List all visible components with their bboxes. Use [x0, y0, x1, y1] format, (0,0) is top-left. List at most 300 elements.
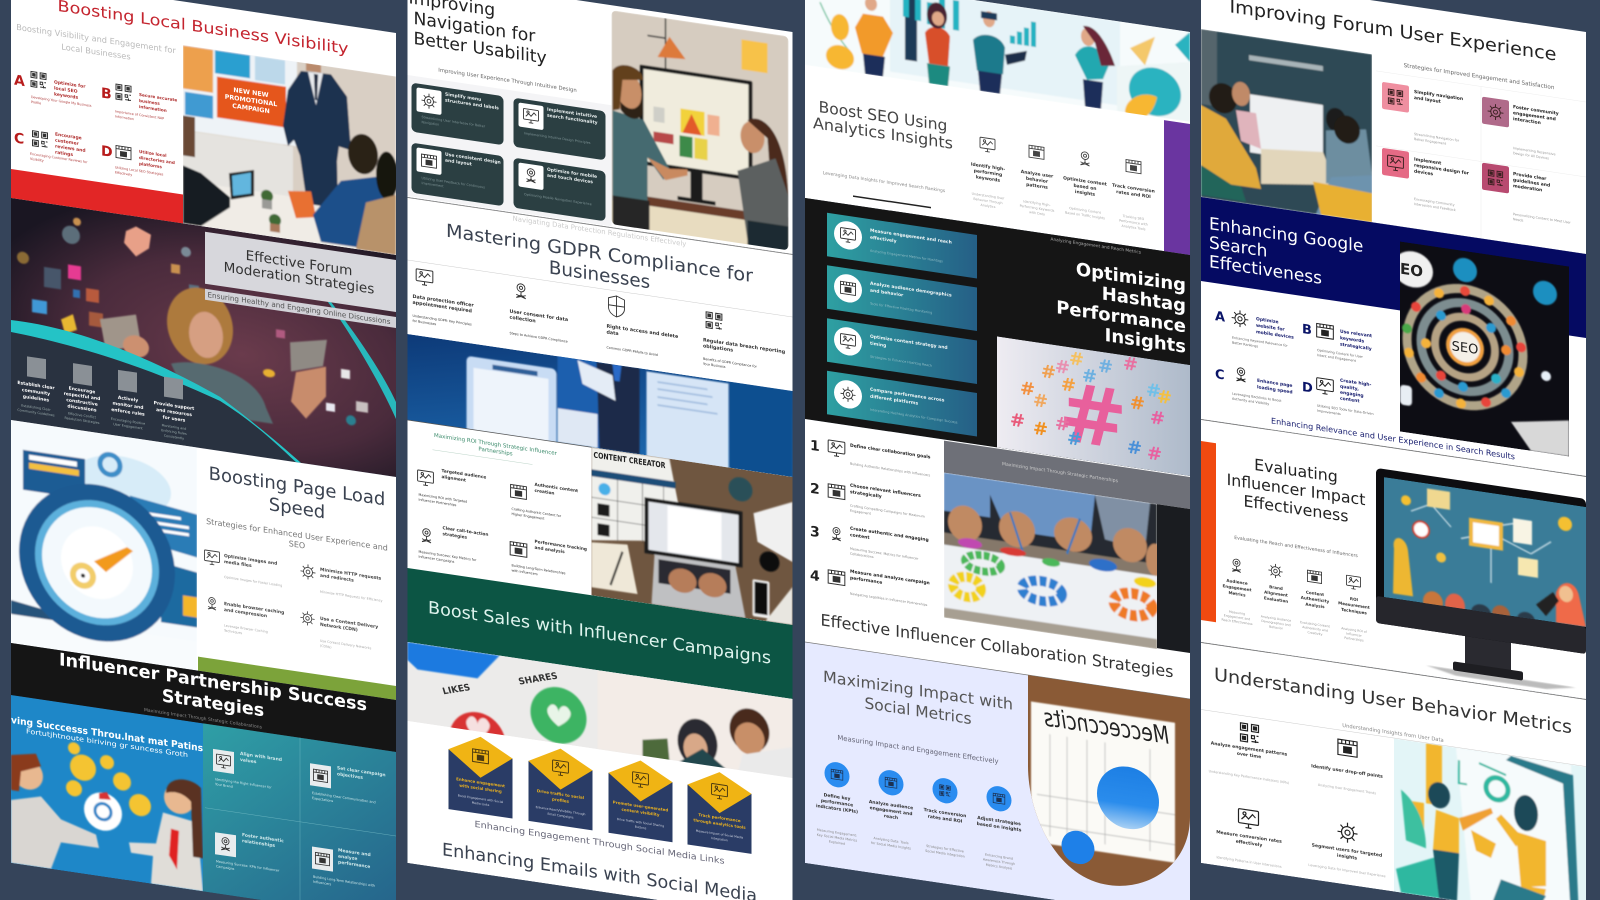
teal grid panel	[203, 723, 396, 900]
image: hand-drawn chart with blue circles	[1028, 675, 1190, 899]
item text: Analyzing User Engagement Trends	[1318, 783, 1376, 795]
item A: A	[1215, 309, 1226, 326]
icon	[828, 570, 845, 586]
title: Influencer Impact	[1227, 470, 1365, 509]
item text: Optimizing Content	[1069, 206, 1102, 215]
item: browser caching	[208, 597, 284, 641]
item 2	[810, 477, 925, 524]
item text: Encouraging Positive	[111, 417, 145, 426]
item text: Intent and Engagement	[1317, 353, 1357, 363]
icon	[313, 769, 328, 783]
big hashtag: #	[1059, 364, 1127, 470]
item text: Right to access and delete	[606, 323, 679, 340]
item text: strategically	[1340, 342, 1372, 352]
item text: media files	[224, 559, 252, 569]
card text: Optimize for mobile	[547, 167, 597, 180]
subtitle: Strategies for Improved Engagement and Satisfaction	[1404, 63, 1555, 91]
photo: desk with laptop and content calendar	[592, 447, 792, 625]
card text: Enhance engagement	[456, 776, 505, 788]
item text: Minimize HTTP requests	[320, 567, 382, 582]
icon	[633, 772, 648, 788]
item text: Influencer Campaigns	[419, 555, 455, 564]
title: Effectiveness	[1243, 491, 1349, 526]
item text: Leverage Browser Caching	[224, 624, 268, 634]
item text: Social Media Integration	[925, 849, 965, 859]
item text: Performing Keywords	[1020, 204, 1055, 213]
item text: Information	[115, 114, 134, 121]
icon	[1388, 89, 1403, 105]
item text: Set clear campaign	[337, 765, 386, 778]
icon	[1232, 309, 1248, 328]
item text: for Businesses	[413, 319, 437, 326]
teal arc	[277, 238, 396, 419]
item D	[102, 145, 175, 176]
item: call to action	[418, 522, 488, 569]
item text: Your Brand	[215, 782, 233, 789]
small hashtags	[1010, 336, 1172, 467]
item text: based on	[1073, 183, 1097, 192]
item text: Crafting Compelling Campaigns for Maximum	[850, 504, 925, 519]
icon	[526, 168, 536, 183]
item text: Resolution Strategies	[65, 416, 100, 425]
item text: Navigating Legalities in Influencer Partnerships	[850, 592, 928, 607]
card text: Integration	[711, 836, 728, 842]
item: access	[606, 294, 679, 360]
item text: Alignment	[1264, 589, 1288, 598]
item: tracking	[510, 535, 587, 584]
garbled image text: ving Succcesss Throu.lnat mat Patins	[11, 715, 203, 754]
illustration: analytics team	[805, 0, 1190, 127]
subtitle: Maximizing Impact Through Strategic Partnerships	[1002, 461, 1119, 484]
item text: Campaigns	[216, 864, 235, 871]
item text: Reach Effectiveness	[1221, 618, 1253, 626]
item text: Establish clear	[17, 380, 55, 392]
item text: Performance with	[1119, 219, 1148, 227]
card text: Drive traffic to social	[537, 788, 585, 800]
icon	[712, 783, 727, 800]
item text: Adjust strategies	[977, 815, 1021, 827]
item text: obligations	[703, 343, 733, 354]
item: measure	[312, 844, 375, 893]
item text: Brand	[1269, 584, 1283, 591]
item 4	[810, 563, 930, 607]
item text: Create high-	[1340, 378, 1371, 388]
item text: Enable browser caching	[224, 601, 284, 616]
item text: analyze	[338, 853, 357, 862]
item text: Create authentic and engaging	[850, 526, 929, 543]
card text: Track performance	[698, 812, 741, 823]
purple strip	[1164, 120, 1190, 255]
bar text: Analyze audience demographics	[870, 281, 952, 299]
item text: Personalizing Content to Meet User	[1513, 212, 1571, 225]
item 1	[17, 355, 55, 418]
card text: Navigation	[422, 120, 439, 127]
item text: devices	[1414, 169, 1433, 177]
bar text: Measure engagement and reach	[870, 228, 952, 246]
item text: Engagement and	[1224, 613, 1250, 621]
title: Evaluating	[1254, 455, 1338, 486]
item text: content	[850, 532, 870, 541]
item text: guidelines	[23, 394, 49, 404]
item text: (CDNs)	[320, 644, 332, 649]
item text: loading speed	[1257, 384, 1293, 396]
panel: Boost SEO Using Analytics Insights	[805, 0, 1190, 255]
mirrored handwriting: Mecceccncits	[1044, 703, 1169, 750]
icon	[1488, 103, 1503, 121]
item text: moderation	[1513, 183, 1542, 193]
item text: Authenticity	[1301, 595, 1330, 604]
item text: ratings	[55, 150, 73, 158]
item: DPO	[412, 268, 474, 332]
title: Speed	[269, 494, 325, 523]
item text: quality,	[1340, 384, 1359, 392]
card text: Streamlining User Interfaces for Better	[421, 115, 486, 129]
item text: creation	[534, 488, 554, 497]
item text: responsive design for	[1414, 163, 1470, 177]
item D	[1302, 372, 1374, 421]
item text: Your Business	[703, 362, 726, 369]
item text: Encourage	[69, 386, 95, 395]
illustration: documents and businessman	[408, 330, 792, 484]
panel: Improving Navigation for Better Usability	[408, 0, 792, 257]
subtitle: Enhancing Engagement Through Social Media Links	[475, 820, 725, 867]
card text: with social sharing	[459, 783, 502, 794]
item 1: 1	[810, 438, 820, 455]
title: Strategies	[162, 686, 264, 721]
icon	[1346, 575, 1361, 590]
item text: Optimize Images for Faster Loading	[224, 575, 282, 588]
panel: Improving Forum User Experience	[1201, 0, 1586, 254]
item text: information	[139, 104, 167, 113]
icon	[840, 386, 856, 403]
item text: Optimize for	[54, 79, 86, 90]
item text: Track conversion	[924, 807, 966, 819]
campaign text on screen: CAMPAIGN	[232, 103, 270, 115]
item text: Measuring Success: KPIs for Influencer	[216, 859, 280, 873]
item text: keywords	[976, 174, 1000, 184]
item text: over time	[1237, 751, 1261, 760]
item text: Utilize local	[139, 149, 167, 158]
item text: values	[240, 757, 257, 765]
illustration: team at monitor	[612, 10, 788, 256]
item text: Utilizing Local SEO Strategies	[115, 165, 164, 177]
subtitle: Local Businesses	[61, 41, 131, 62]
icon	[1488, 170, 1503, 186]
item text: Align with brand	[240, 751, 282, 763]
item text: Evaluating Content	[1300, 620, 1331, 629]
item text: Data protection officer	[412, 294, 474, 309]
item text: performance	[850, 575, 882, 586]
underline	[853, 196, 931, 208]
item text: Profile	[31, 100, 41, 105]
green band	[408, 568, 792, 699]
card text: Measure Impact of Social Media	[696, 829, 743, 840]
subtitle box	[205, 289, 396, 328]
item text: Influencers	[313, 880, 331, 886]
item text: Understanding Key Performance Indicators (KPIs)	[1209, 769, 1289, 785]
item 2	[1020, 144, 1055, 218]
item text: Enhancing Brand	[985, 853, 1013, 861]
item: align	[213, 747, 282, 796]
icon	[208, 597, 216, 610]
icon	[940, 785, 950, 797]
item text: effectively	[1236, 839, 1262, 849]
image: hashtags	[997, 335, 1190, 479]
item text: indicators (KPIs)	[816, 803, 858, 815]
item text: Leveraging Backlinks to Boost	[1232, 392, 1282, 403]
item text: Strategies for Effective	[926, 844, 964, 854]
item text: Partnerships	[1344, 636, 1364, 643]
card text: Utilizing User Feedback for Continuous	[421, 176, 485, 190]
item: breach	[703, 311, 786, 378]
icon	[1338, 821, 1358, 844]
card 1	[448, 732, 512, 819]
card 1	[412, 83, 504, 145]
icon	[980, 137, 995, 153]
item text: Tracking SEO	[1122, 214, 1145, 221]
item text: Measurement	[1338, 600, 1370, 610]
title: Navigation for	[414, 9, 536, 47]
item text: Identifying Patterns in User Interactions	[1216, 855, 1282, 869]
green band	[198, 657, 396, 700]
item: drop-off	[1311, 735, 1383, 796]
item text: Authenticity and	[1302, 625, 1328, 633]
small hashtags: #	[1055, 356, 1070, 379]
panel: Understanding User Behavior Metrics	[1201, 642, 1586, 900]
photo: likes, shares and couple	[408, 642, 792, 815]
subtitle: Improving User Experience Through Intuitive Design	[438, 68, 577, 94]
icon	[832, 527, 841, 541]
item text: strategies	[442, 531, 468, 541]
title: Boost SEO Using	[819, 98, 947, 135]
item text: Improvements	[1317, 409, 1341, 416]
item text: reviews and	[55, 144, 86, 154]
card 3	[608, 756, 672, 842]
item D: D	[1302, 380, 1313, 397]
card 3	[412, 143, 504, 206]
item text: Creativity	[1308, 630, 1323, 636]
item: guidelines	[1482, 163, 1571, 230]
panel: Enhancing Google Search Effectiveness	[1201, 197, 1586, 476]
illustration: monitor	[1376, 468, 1586, 695]
icon	[1080, 151, 1090, 166]
subtitle: Navigating Data Protection Regulations Effectively	[513, 215, 686, 248]
bar text: and behavior	[870, 288, 904, 299]
item text: Design for All Devices	[1513, 151, 1549, 161]
small hashtags: #	[1055, 413, 1070, 436]
icon	[1240, 723, 1258, 744]
card 2	[528, 744, 592, 830]
item text: Authority and Visibility	[1232, 397, 1269, 406]
item text: Monitoring and	[162, 423, 186, 431]
item: ROI	[1338, 574, 1370, 643]
item: audience	[418, 465, 486, 512]
item text: Performance tracking	[534, 539, 587, 553]
title: Analytics Insights	[813, 114, 953, 153]
item: CDN	[300, 610, 378, 656]
item text: Define clear collaboration goals	[850, 443, 931, 461]
item text: Provide support	[154, 400, 195, 412]
item: responsive	[1382, 148, 1470, 214]
item text: Expectations	[312, 796, 333, 803]
small hashtags: #	[1082, 365, 1097, 388]
item text: Influencer Partnerships	[419, 498, 457, 507]
card 2	[514, 98, 606, 160]
bar text: Interpreting Hashtag Analytics for Campaign Success	[870, 408, 958, 425]
bar text: Strategies to Enhance Hashtag Reach	[870, 355, 932, 368]
icon	[1232, 559, 1241, 573]
item text: Use relevant	[1340, 329, 1373, 339]
title: Optimizing	[1076, 259, 1186, 296]
small hashtags: #	[1098, 355, 1113, 379]
small hashtags: #	[1130, 392, 1145, 415]
icon	[216, 754, 231, 769]
item: navigation	[1382, 82, 1463, 148]
subtitle: Strategies for Enhanced User Experience and	[206, 517, 388, 553]
item text: Measure conversion rates	[1216, 829, 1282, 845]
item 2: 2	[810, 481, 820, 498]
title box	[205, 232, 396, 312]
title: Effective Influencer Collaboration Strategies	[820, 610, 1173, 682]
item text: Foster community	[1513, 104, 1559, 117]
item text: behavior	[1026, 176, 1049, 185]
icon	[27, 356, 46, 379]
card text: Media Links	[472, 801, 490, 807]
column 4 of slides	[1201, 0, 1586, 900]
item text: Measure and	[338, 847, 371, 858]
item text: Collaborations	[850, 552, 874, 559]
item text: Engagement	[850, 509, 872, 516]
item text: Identifying High-	[1023, 199, 1051, 207]
illustration: speed gauge	[11, 420, 197, 671]
item text: customer	[55, 138, 79, 147]
illustration: handshake with coins	[11, 695, 203, 891]
dark side block	[1157, 504, 1190, 653]
column 1 of slides	[11, 0, 398, 900]
small hashtags: #	[1041, 361, 1056, 384]
icon	[1268, 563, 1283, 579]
icon	[118, 370, 137, 393]
bar 3	[827, 318, 977, 384]
cloud label: EO	[1400, 260, 1423, 281]
item text: Implement	[1414, 157, 1442, 167]
title: Businesses	[549, 258, 650, 293]
item text: engaging	[1340, 390, 1364, 399]
subtitle: Ensuring Healthy and Engaging Online Discussions	[208, 290, 391, 326]
item text: Analyze audience	[869, 799, 913, 811]
icon	[204, 550, 220, 566]
item text: Analyzing ROI of	[1341, 626, 1368, 634]
small hashtags: #	[1069, 348, 1084, 371]
item 3	[111, 369, 145, 431]
item text: and redirects	[320, 573, 354, 584]
item: brand	[1261, 562, 1291, 632]
item text: Maximizing ROI with Targeted	[419, 493, 467, 504]
card text: content visibility	[622, 807, 660, 817]
item text: Identifying the Right Influencer for	[215, 777, 272, 790]
item text: Community Guidelines	[17, 408, 55, 417]
item text: Measuring Engagement:	[817, 828, 857, 838]
card text: Buttons	[635, 825, 647, 830]
item text: Steps to Achieve GDPR Compliance	[510, 331, 568, 344]
icon	[315, 852, 330, 866]
item text: Metrics	[1228, 590, 1246, 598]
navy banner	[1201, 197, 1586, 338]
item text: Authentic content	[534, 482, 578, 494]
item text: engagement and	[1513, 110, 1556, 123]
item text: Use Content Delivery Networks	[320, 639, 372, 650]
item text: Segment users for targeted	[1312, 842, 1382, 859]
image: SEO network	[1393, 240, 1569, 456]
item text: Audience	[1226, 578, 1248, 586]
item text: Understanding User	[972, 192, 1005, 201]
card text: profiles	[552, 796, 570, 804]
item 4: 4	[810, 568, 820, 585]
icon	[418, 470, 433, 486]
icon	[1126, 160, 1141, 174]
label: shares: SHARES	[517, 672, 559, 688]
item: engagement patterns	[1209, 718, 1289, 785]
title: Influencer Partnership Success	[59, 650, 367, 716]
item text: alignment	[442, 474, 466, 484]
item 2	[64, 362, 100, 425]
small hashtags: #	[1067, 428, 1082, 451]
item text: Common GDPR Pitfalls to Avoid	[606, 345, 658, 357]
item text: Regular data breach reporting	[703, 337, 786, 355]
item text: User Engagement	[113, 422, 143, 431]
icon	[993, 793, 1005, 804]
item text: rates and ROI	[1116, 189, 1151, 200]
item text: Clear call-to-action	[442, 525, 488, 538]
item text: User consent for data	[510, 309, 568, 323]
item 4	[1112, 157, 1155, 233]
item text: Influencer	[1346, 632, 1362, 638]
item text: enforce rules	[111, 407, 145, 418]
icon	[828, 484, 845, 500]
card 4	[688, 767, 752, 854]
item text: Building Long-Term Relationships	[512, 563, 566, 575]
bar text: Optimize content strategy and	[870, 334, 948, 351]
item text: with Influencers	[512, 568, 538, 576]
icon	[422, 528, 431, 543]
item text: relationships	[242, 838, 275, 849]
bar text: Compare performance across	[870, 387, 945, 404]
small hashtags: #	[1033, 418, 1048, 441]
item: audience	[869, 767, 913, 851]
title: Hashtag	[1102, 284, 1186, 317]
item text: Analysis	[1305, 601, 1325, 609]
item text: respectful and	[64, 391, 100, 402]
bar text: effectively	[870, 235, 897, 245]
item text: monitor and	[113, 401, 143, 411]
card text: Use consistent design	[445, 152, 501, 166]
card text: Implementing Intuitive Design Principles	[524, 131, 591, 145]
item text: Demographics and	[1261, 619, 1291, 627]
item text: reach	[884, 813, 898, 821]
illustration: meeting room	[1201, 29, 1372, 222]
item text: Building Long-Term Relationships with	[313, 875, 375, 888]
icon	[1317, 378, 1333, 395]
panel: Boosting Local Business Visibility	[11, 0, 398, 256]
item text: objectives	[337, 771, 363, 781]
item text: Track conversion	[1112, 182, 1155, 195]
small hashtags: #	[1061, 374, 1076, 397]
small hashtags: #	[1033, 390, 1048, 413]
subtitle: Boosting Visibility and Engagement for	[16, 22, 176, 55]
small hashtags: #	[1150, 407, 1165, 430]
item text: Optimize content	[1063, 175, 1108, 188]
item text: website for	[1256, 323, 1285, 333]
